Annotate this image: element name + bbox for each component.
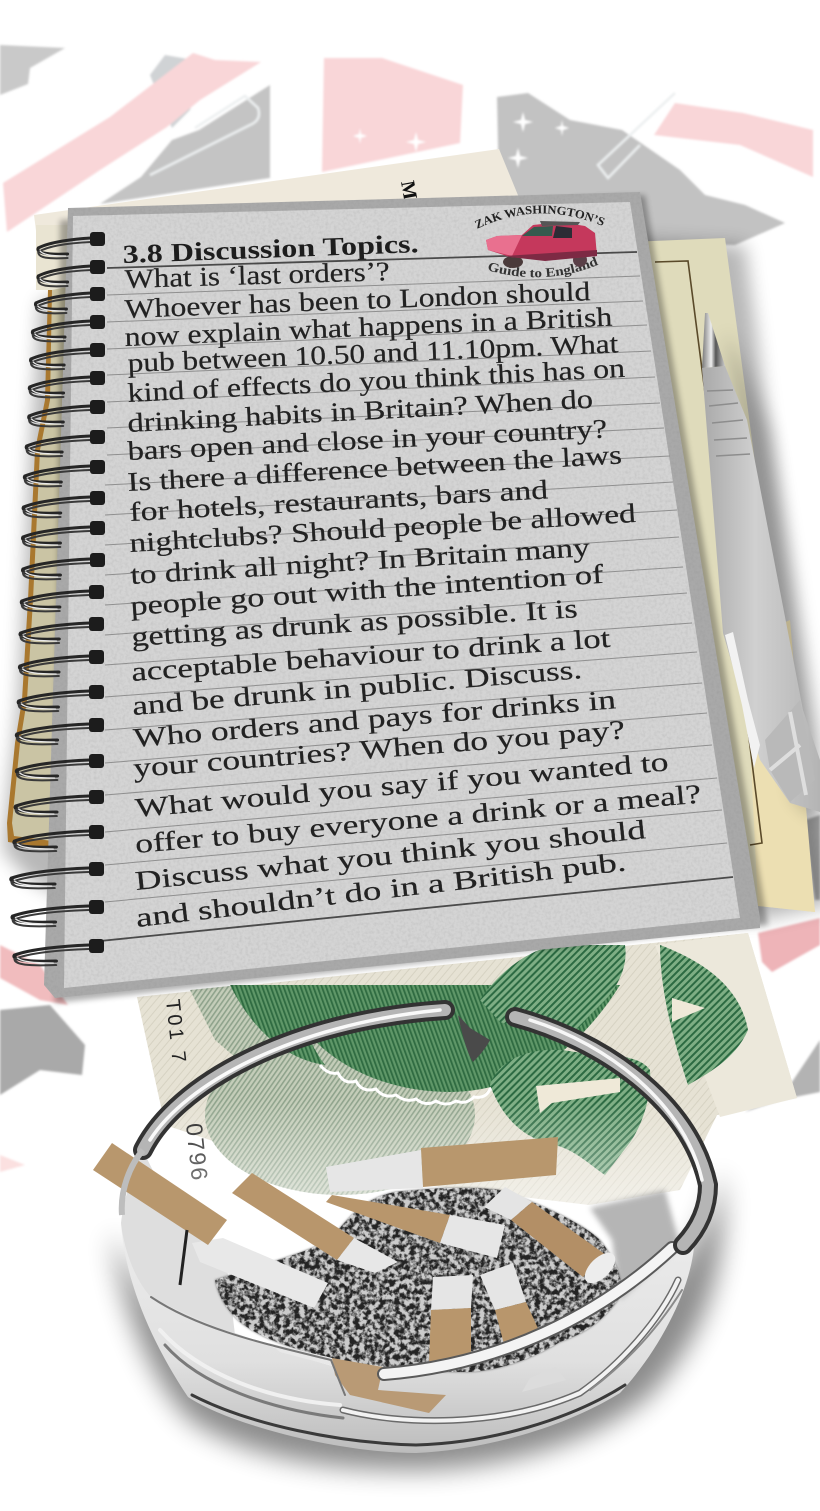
icon: red three-wheeler car [486,221,597,268]
body text: bars open and close in your country? [127,413,608,466]
butt: right, end cap [579,1247,621,1289]
paper sheets behind the notebook [2,149,820,920]
numeral 1 on lower rosette [536,1078,620,1113]
butt: middle, tan filter [326,1195,450,1243]
note fade near the tray [150,1100,700,1210]
notebook shadow [55,195,768,1003]
body text: now explain what happens in a British [124,302,613,352]
body text: Who orders and pays for drinks in [132,684,618,753]
sparkles [353,112,569,168]
butt: in front notch, white end [269,1343,333,1366]
safety pins [150,93,675,178]
logo bottom line: Guide to England [488,256,598,278]
body text: drinking habits in Britain? When do [127,384,594,438]
butt: top horizontal, tan filter [421,1137,558,1187]
body text [124,256,702,933]
numeral 1 on right rosette [672,998,705,1022]
butt: lower left, white part [192,1238,328,1308]
butt: centre, white part [337,1238,398,1273]
body text: nightclubs? Should people be allowed [129,498,637,558]
butt: right, tan filter [511,1202,606,1277]
body text: pub between 10.50 and 11.10pm. What [127,328,619,378]
butt: upright, tan filter [429,1308,471,1362]
glass bowl [121,1223,694,1453]
page rules [105,276,727,902]
ash speckle [215,1188,621,1372]
body text: your countries? When do you pay? [132,714,626,783]
butt: in front notch, tan filter [332,1358,446,1413]
logo top line: ZAK WASHINGTON’S [474,205,605,229]
inner grey shade, right [590,1190,680,1300]
scalloped seal border [320,1065,504,1104]
butt: slanted, lower white end [522,1367,566,1392]
body text: kind of effects do you think this has on [127,353,626,408]
shadow of sheets [2,240,820,920]
body text: acceptable behaviour to drink a lot [130,623,612,687]
body text: Whoever has been to London should [124,276,591,324]
body text: and be drunk in public. Discuss. [131,654,583,721]
dark glint on left glass [180,1230,187,1285]
body text: Is there a difference between the laws [127,439,623,497]
butt: top horizontal, white part [326,1150,423,1192]
body text: What is ‘last orders’? [124,256,390,294]
pen body [702,366,820,812]
butt: middle, white part [440,1215,505,1258]
butt: upright, white part [431,1275,473,1310]
inner left glass [121,1150,235,1335]
paper grain [44,192,760,998]
green seal [282,985,620,1092]
pen clip [725,632,760,768]
serial number: T01 7 [161,998,190,1066]
cigarette notch in rim [458,1015,490,1062]
lower rosette [490,1050,650,1175]
butt: lower left, tan filter [93,1143,227,1245]
spiral binding [11,232,105,965]
cream top sheet [34,149,522,262]
top ornament [480,945,626,1037]
body text: Discuss what you think you should [134,814,648,896]
ash pile [215,1188,621,1372]
background: torn Union Jack flag [0,45,820,1172]
ashtray with cigarette butts [93,1010,723,1470]
body text: offer to buy everyone a drink or a meal? [134,779,702,859]
pen tip [702,313,725,368]
pen [702,313,820,820]
cigarette butts [93,1137,621,1413]
butt: slanted, tan filter [495,1302,541,1348]
notebook page [64,202,740,988]
body text: What would you say if you wanted to [134,746,669,823]
yellow right sheet [630,238,815,912]
chrome rim, right arc [515,1017,708,1245]
right rosette [660,945,748,1085]
printed rule on yellow sheet [655,261,762,845]
banknote [137,933,797,1210]
engraved pale hatch [205,1035,475,1195]
chrome rim, left arc [143,1010,445,1150]
body text: for hotels, restaurants, bars and [129,474,549,527]
heavy top and bottom rules [100,252,733,941]
notebook cover frame [44,192,760,998]
body text: and shouldn’t do in a British pub. [134,846,627,933]
butt: slanted, white part [480,1263,526,1310]
body text: getting as drunk as possible. It is [130,593,578,652]
butt: right, white part [484,1187,532,1220]
left tan sheet [7,286,72,850]
note paper [137,933,797,1205]
butt: centre, tan filter [232,1173,354,1260]
serial digits: 0796 [181,1122,213,1183]
letter on cream sheet: M. [396,179,422,206]
front glass rims [151,1248,682,1445]
glass rim left glint [122,1150,143,1215]
dark band left of seal [230,985,325,1065]
heading: 3.8 Discussion Topics. [122,229,419,269]
grip bands [707,390,750,456]
body text: people go out with the intention of [129,559,604,621]
body text: to drink all night? In Britain many [130,532,591,590]
notebook [9,192,770,1006]
ashtray cast shadow [112,1170,723,1470]
logo: Zak Washington's Guide to England [474,205,605,278]
